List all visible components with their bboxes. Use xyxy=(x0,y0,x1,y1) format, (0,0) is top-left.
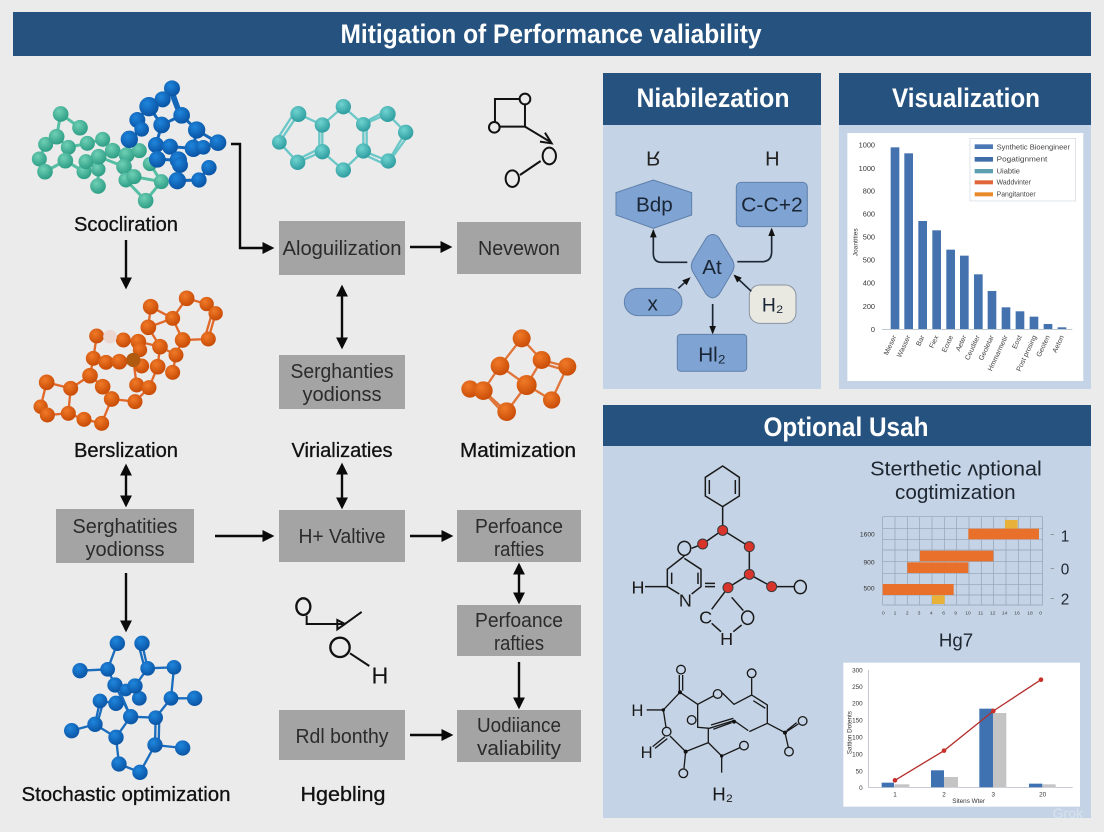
arrow: Virializaties to H+ Valtive xyxy=(341,465,343,507)
panel: Optional Usah xyxy=(603,405,1091,818)
bar chart: Eoxte xyxy=(941,334,955,354)
combo chart: 0 xyxy=(859,785,863,792)
box: Nevewon: Nevewon xyxy=(478,238,560,260)
flow diagram: At xyxy=(702,256,722,279)
gantt chart: 0 xyxy=(882,610,885,616)
flow diagram: C-C+2 xyxy=(741,194,803,217)
gantt chart: 3 xyxy=(918,610,921,616)
label: Scocliration: Scocliration xyxy=(74,214,178,236)
bar chart: Post prosing xyxy=(1016,334,1039,373)
bar chart: 500 xyxy=(863,233,875,242)
box: Perfoance rafties lower: Perfoance xyxy=(475,610,563,632)
bar chart: Wasser xyxy=(896,334,913,359)
icon: O-H structure xyxy=(296,598,388,688)
gantt chart: 0 xyxy=(1061,561,1069,578)
molecule: teal and blue cluster xyxy=(32,81,226,208)
molecule: black line structure xyxy=(631,665,807,805)
bar chart: Uiabtie xyxy=(997,167,1020,176)
box: Aloguilization: Aloguilization xyxy=(282,238,402,260)
arrow: between Perfoance boxes xyxy=(518,565,520,602)
gantt chart: 1 xyxy=(894,610,897,616)
molecule: structure with red nodes: C xyxy=(699,607,712,627)
box: Serghanties yodionss: Serghanties xyxy=(290,361,394,383)
combo chart: Sattion Dotents xyxy=(847,711,854,754)
label: Stochastic optimization: Stochastic optimization xyxy=(22,784,230,806)
flow diagram: H₂ xyxy=(762,296,783,317)
icon: square ring structure xyxy=(489,94,556,187)
box: Rdl bonthy xyxy=(279,710,405,760)
bar chart: 600 xyxy=(863,209,875,218)
gantt chart: 9 xyxy=(954,610,957,616)
flow diagram: R xyxy=(646,146,661,168)
title banner: Mitigation of Performance valiability xyxy=(340,19,762,49)
gantt chart: 10 xyxy=(965,610,971,616)
gantt chart: 1 xyxy=(1061,528,1069,545)
icon: O-H structure: H xyxy=(372,662,388,688)
combo chart: 1 xyxy=(893,791,897,798)
box: Perfoance rafties top: Perfoance xyxy=(475,516,563,538)
combo chart xyxy=(843,663,1080,807)
bar chart: 400 xyxy=(863,279,875,288)
bar chart: Waddvinter xyxy=(997,178,1031,187)
arrow: Perfoance to Uodiiance xyxy=(518,662,520,707)
bar chart: 0 xyxy=(871,325,875,334)
molecule: black line structure: H₂ xyxy=(712,784,733,805)
gantt chart: 11 xyxy=(978,610,983,616)
box: Serghatities yodionss: Serghatities xyxy=(72,516,178,538)
bar chart: Pangitantoer xyxy=(997,190,1036,199)
box: Perfoance rafties top xyxy=(457,510,581,562)
combo chart: 100 xyxy=(852,734,863,741)
arrow: connector to Aloguilization xyxy=(231,144,272,248)
flow diagram xyxy=(616,146,807,371)
heading: Sterthetic optional cogtimization: Sterthetic ʌptional xyxy=(870,459,1042,481)
gantt chart: 1600 xyxy=(860,531,875,538)
box: Perfoance rafties lower xyxy=(457,605,581,656)
combo chart: 200 xyxy=(852,701,863,708)
gantt chart: 2 xyxy=(1061,592,1069,609)
box: Nevewon xyxy=(457,222,581,274)
gantt chart: 2 xyxy=(906,610,909,616)
gantt chart: Hg7 xyxy=(939,630,973,651)
flow diagram: Bdp xyxy=(636,194,673,217)
combo chart: 20 xyxy=(1039,791,1047,798)
gantt chart: 900 xyxy=(863,560,875,567)
combo chart: 250 xyxy=(852,684,863,691)
panel: Niabilezation xyxy=(603,73,821,389)
bar chart: Bar xyxy=(916,334,927,347)
bar chart: Geoletar xyxy=(978,334,996,362)
bar chart: 800 xyxy=(863,187,875,196)
combo chart: Sitens Wter xyxy=(952,798,985,805)
molecule: structure with red nodes: H xyxy=(631,577,644,597)
molecule: orange small xyxy=(461,329,576,421)
molecule: cyan two-ring xyxy=(272,99,413,177)
gantt chart: 16 xyxy=(1014,610,1020,616)
box: Serghanties yodionss xyxy=(279,355,405,409)
gantt chart: 12 xyxy=(990,610,996,616)
bar chart: 1000 xyxy=(859,164,875,173)
combo chart: 3 xyxy=(992,791,996,798)
bar chart: Ceuditer xyxy=(964,334,982,361)
bar chart: 200 xyxy=(863,302,875,311)
combo chart: 150 xyxy=(852,717,863,724)
bar chart: Pogatignment xyxy=(997,155,1047,164)
arrow: Aloguilization to Serghanties xyxy=(341,287,343,347)
arrow: H+ Valtive to Perfoance xyxy=(410,535,451,537)
bar chart: Synthetic Bioengineer xyxy=(997,142,1071,151)
gantt chart: 4 xyxy=(930,610,933,616)
molecule: structure with red nodes: H xyxy=(720,629,733,649)
bar chart: Fiex xyxy=(929,334,941,349)
arrow: Rdl bonthy to Uodiiance xyxy=(410,734,451,736)
combo chart: 100 xyxy=(852,751,863,758)
gantt chart: 6 xyxy=(942,610,945,616)
box: H+ Valtive: H+ Valtive xyxy=(298,526,386,548)
gantt chart: 18 xyxy=(1027,610,1033,616)
heading: Visualization: Visualization xyxy=(892,83,1040,113)
box: Serghatities yodionss: yodionss xyxy=(86,539,164,561)
label: Virializaties: Virializaties xyxy=(292,440,392,462)
bar chart xyxy=(847,133,1083,381)
flow diagram: H xyxy=(765,149,780,171)
combo chart: 300 xyxy=(852,667,863,674)
molecule: orange large xyxy=(34,291,222,430)
box: Aloguilization xyxy=(279,221,405,275)
bar chart: Mieser xyxy=(883,334,899,356)
box: Uodiiance valiability xyxy=(457,710,581,762)
box: Perfoance rafties lower: rafties xyxy=(494,633,544,655)
bar chart: Eost xyxy=(1012,334,1024,350)
gantt chart: 0 xyxy=(1039,610,1042,616)
box: Serghatities yodionss xyxy=(56,509,194,563)
arrow: Aloguilization to Nevewon xyxy=(410,246,450,248)
heading: Niabilezation: Niabilezation xyxy=(636,83,790,113)
bar chart: Joantities xyxy=(852,228,859,256)
molecule: structure with red nodes xyxy=(631,466,806,649)
arrow: Berslization to Serghatities xyxy=(125,466,127,505)
bar chart: Geoten xyxy=(1036,334,1052,358)
box: Perfoance rafties top: rafties xyxy=(494,539,544,561)
gantt chart: 14 xyxy=(1002,610,1008,616)
bar chart: Aeton xyxy=(1052,334,1066,354)
label: Berslization: Berslization xyxy=(74,440,178,462)
box: Serghanties yodionss: yodionss xyxy=(302,384,382,406)
watermark: Grok xyxy=(1053,805,1084,821)
bar chart: 1000 xyxy=(859,141,875,150)
flow diagram: Hl₂ xyxy=(698,344,726,367)
gantt chart xyxy=(860,517,1069,651)
title banner xyxy=(13,12,1091,56)
molecule: black line structure: H xyxy=(631,701,643,720)
box: Uodiiance valiability: valiability xyxy=(477,738,561,760)
box: H+ Valtive xyxy=(279,510,405,562)
label: Matimization: Matimization xyxy=(460,440,576,462)
molecule: black line structure: H xyxy=(641,743,653,762)
box: Rdl bonthy: Rdl bonthy xyxy=(296,726,388,748)
combo chart: 50 xyxy=(856,768,863,775)
panel: Visualization xyxy=(839,73,1091,389)
gantt chart: 500 xyxy=(863,586,875,593)
arrow: Scocliration down xyxy=(125,240,127,287)
heading: Sterthetic optional cogtimization: cogtimization xyxy=(895,482,1016,504)
combo chart: 2 xyxy=(942,791,946,798)
bar chart: 500 xyxy=(863,256,875,265)
molecule: blue lower xyxy=(64,636,202,780)
molecule: structure with red nodes: N xyxy=(679,591,692,611)
label: Hgebling: Hgebling xyxy=(300,784,386,806)
arrow: Serghatities down xyxy=(125,573,127,630)
heading: Sterthetic optional cogtimization xyxy=(870,459,1042,504)
box: Uodiiance valiability: Uodiiance xyxy=(477,715,561,737)
bar chart: Hmmarmetir xyxy=(987,334,1010,372)
bar chart: Aeter xyxy=(955,334,969,353)
flow diagram: x xyxy=(647,293,658,316)
arrow: Serghatities to H+ Valtive xyxy=(215,535,272,537)
heading: Optional Usah: Optional Usah xyxy=(764,412,928,442)
